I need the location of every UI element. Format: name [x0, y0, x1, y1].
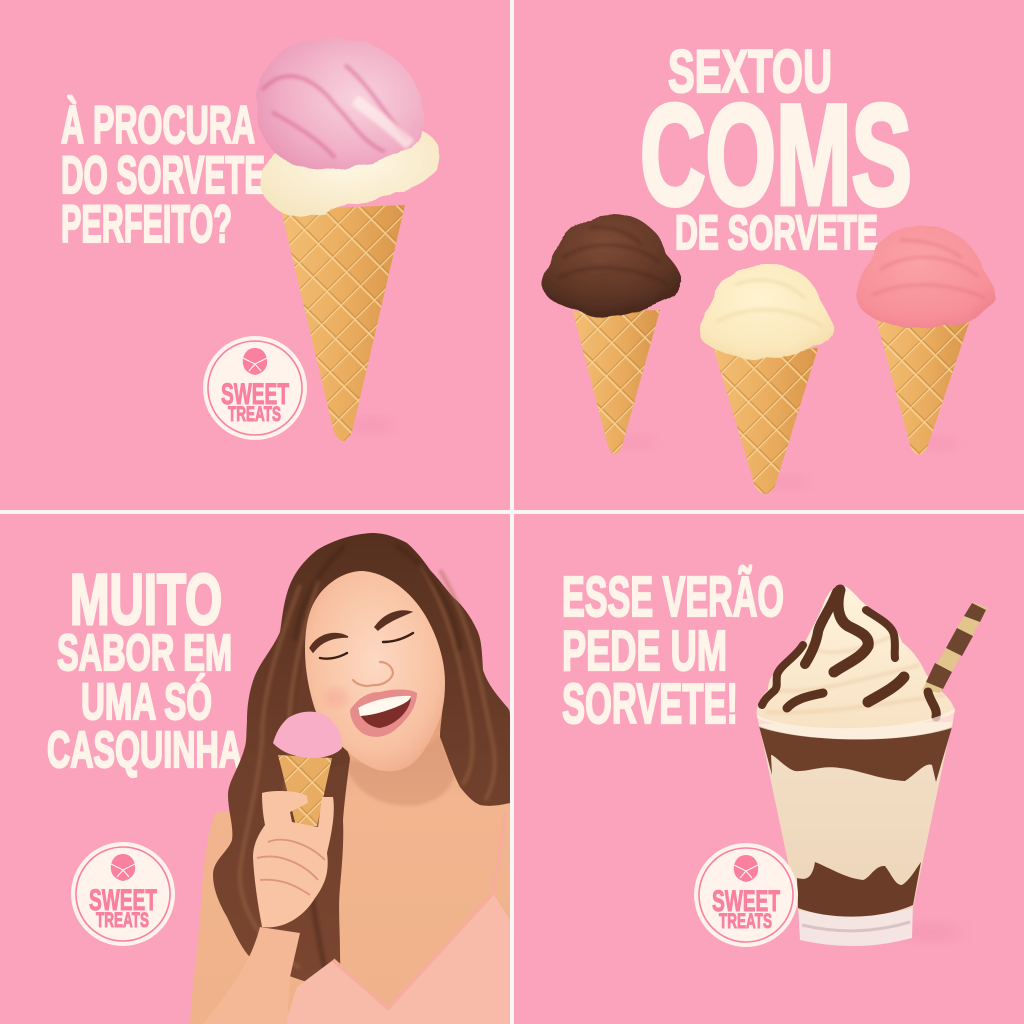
glass base — [798, 903, 913, 946]
glass rim — [757, 708, 955, 740]
logo: sweet treats — [203, 336, 307, 440]
panel: sextou coms de sorvete — [514, 0, 1024, 510]
straw drip — [928, 692, 936, 717]
heading: muito sabor em uma só casquinha: MUITO — [70, 561, 222, 640]
logo: sweet treats — [71, 842, 175, 946]
heading: muito sabor em uma só casquinha: UMA SÓ — [81, 673, 212, 730]
illustration: laughing woman with cone — [190, 533, 510, 1024]
chocolate upper band — [759, 726, 952, 782]
neck shadow — [345, 735, 455, 806]
eyes — [320, 633, 413, 659]
panel: esse verão — [514, 514, 1024, 1024]
logo: sweet treats: SWEET — [712, 885, 780, 918]
chocolate drizzle — [762, 590, 904, 708]
torso and shoulder — [190, 700, 510, 1024]
icon: vanilla cone — [700, 264, 833, 494]
eyebrows — [310, 611, 411, 652]
heading: sextou coms de sorvete: DE SORVETE — [675, 207, 878, 260]
heading: à procura do sorvete perfeito — [61, 95, 265, 254]
heading: muito sabor em uma só casquinha: SABOR EM — [57, 624, 232, 681]
heading: muito sabor em uma só casquinha: CASQUINHA — [47, 721, 242, 778]
mouth — [350, 689, 417, 737]
cheek blush — [324, 688, 348, 708]
heading: esse verão pede um sorvete: ESSE VERÃO — [562, 565, 784, 629]
hair shadow strands — [295, 545, 460, 970]
fingers — [257, 840, 325, 895]
whip folds — [765, 635, 945, 713]
heading: esse verão pede um sorvete — [562, 565, 784, 736]
illustration: chocolate milkshake — [757, 585, 988, 946]
logo: sweet treats: SWEET — [221, 378, 289, 411]
heading: sextou coms de sorvete: SEXTOU — [668, 38, 832, 105]
heading: sextou coms de sorvete — [640, 38, 912, 260]
heading: à procura do sorvete perfeito: DO SORVETE — [61, 146, 265, 205]
glass cup — [759, 722, 952, 916]
whipped cream — [757, 585, 955, 728]
top — [285, 893, 510, 1024]
logo: sweet treats: TREATS — [719, 910, 772, 933]
panel: perfect ice cream — [0, 0, 510, 510]
logo: sweet treats: TREATS — [228, 403, 281, 426]
logo: sweet treats — [694, 843, 798, 947]
heading: à procura do sorvete perfeito: À PROCURA — [61, 95, 255, 155]
heading: muito sabor em uma só casquinha — [47, 561, 242, 778]
icon: strawberry cone — [856, 226, 996, 455]
icon: chocolate cone — [542, 214, 682, 454]
ice cream cone in hand — [273, 712, 342, 826]
heading: à procura do sorvete perfeito: PERFEITO? — [61, 195, 232, 254]
panel: muito sabor — [0, 514, 510, 1024]
nose — [353, 662, 393, 686]
hair strands — [240, 565, 495, 968]
hair behind jaw — [295, 660, 350, 770]
forearm — [203, 927, 300, 1024]
hand — [253, 791, 334, 927]
icon: large two-scoop cone — [255, 38, 439, 441]
wafer straw — [922, 602, 988, 693]
heading: esse verão pede um sorvete: PEDE UM — [562, 619, 727, 683]
logo: sweet treats: SWEET — [89, 884, 157, 917]
hair mass — [213, 533, 510, 992]
face — [305, 571, 445, 771]
logo: sweet treats: TREATS — [96, 909, 149, 932]
chocolate lower band — [797, 862, 921, 917]
heading: esse verão pede um sorvete: SORVETE! — [562, 672, 738, 736]
